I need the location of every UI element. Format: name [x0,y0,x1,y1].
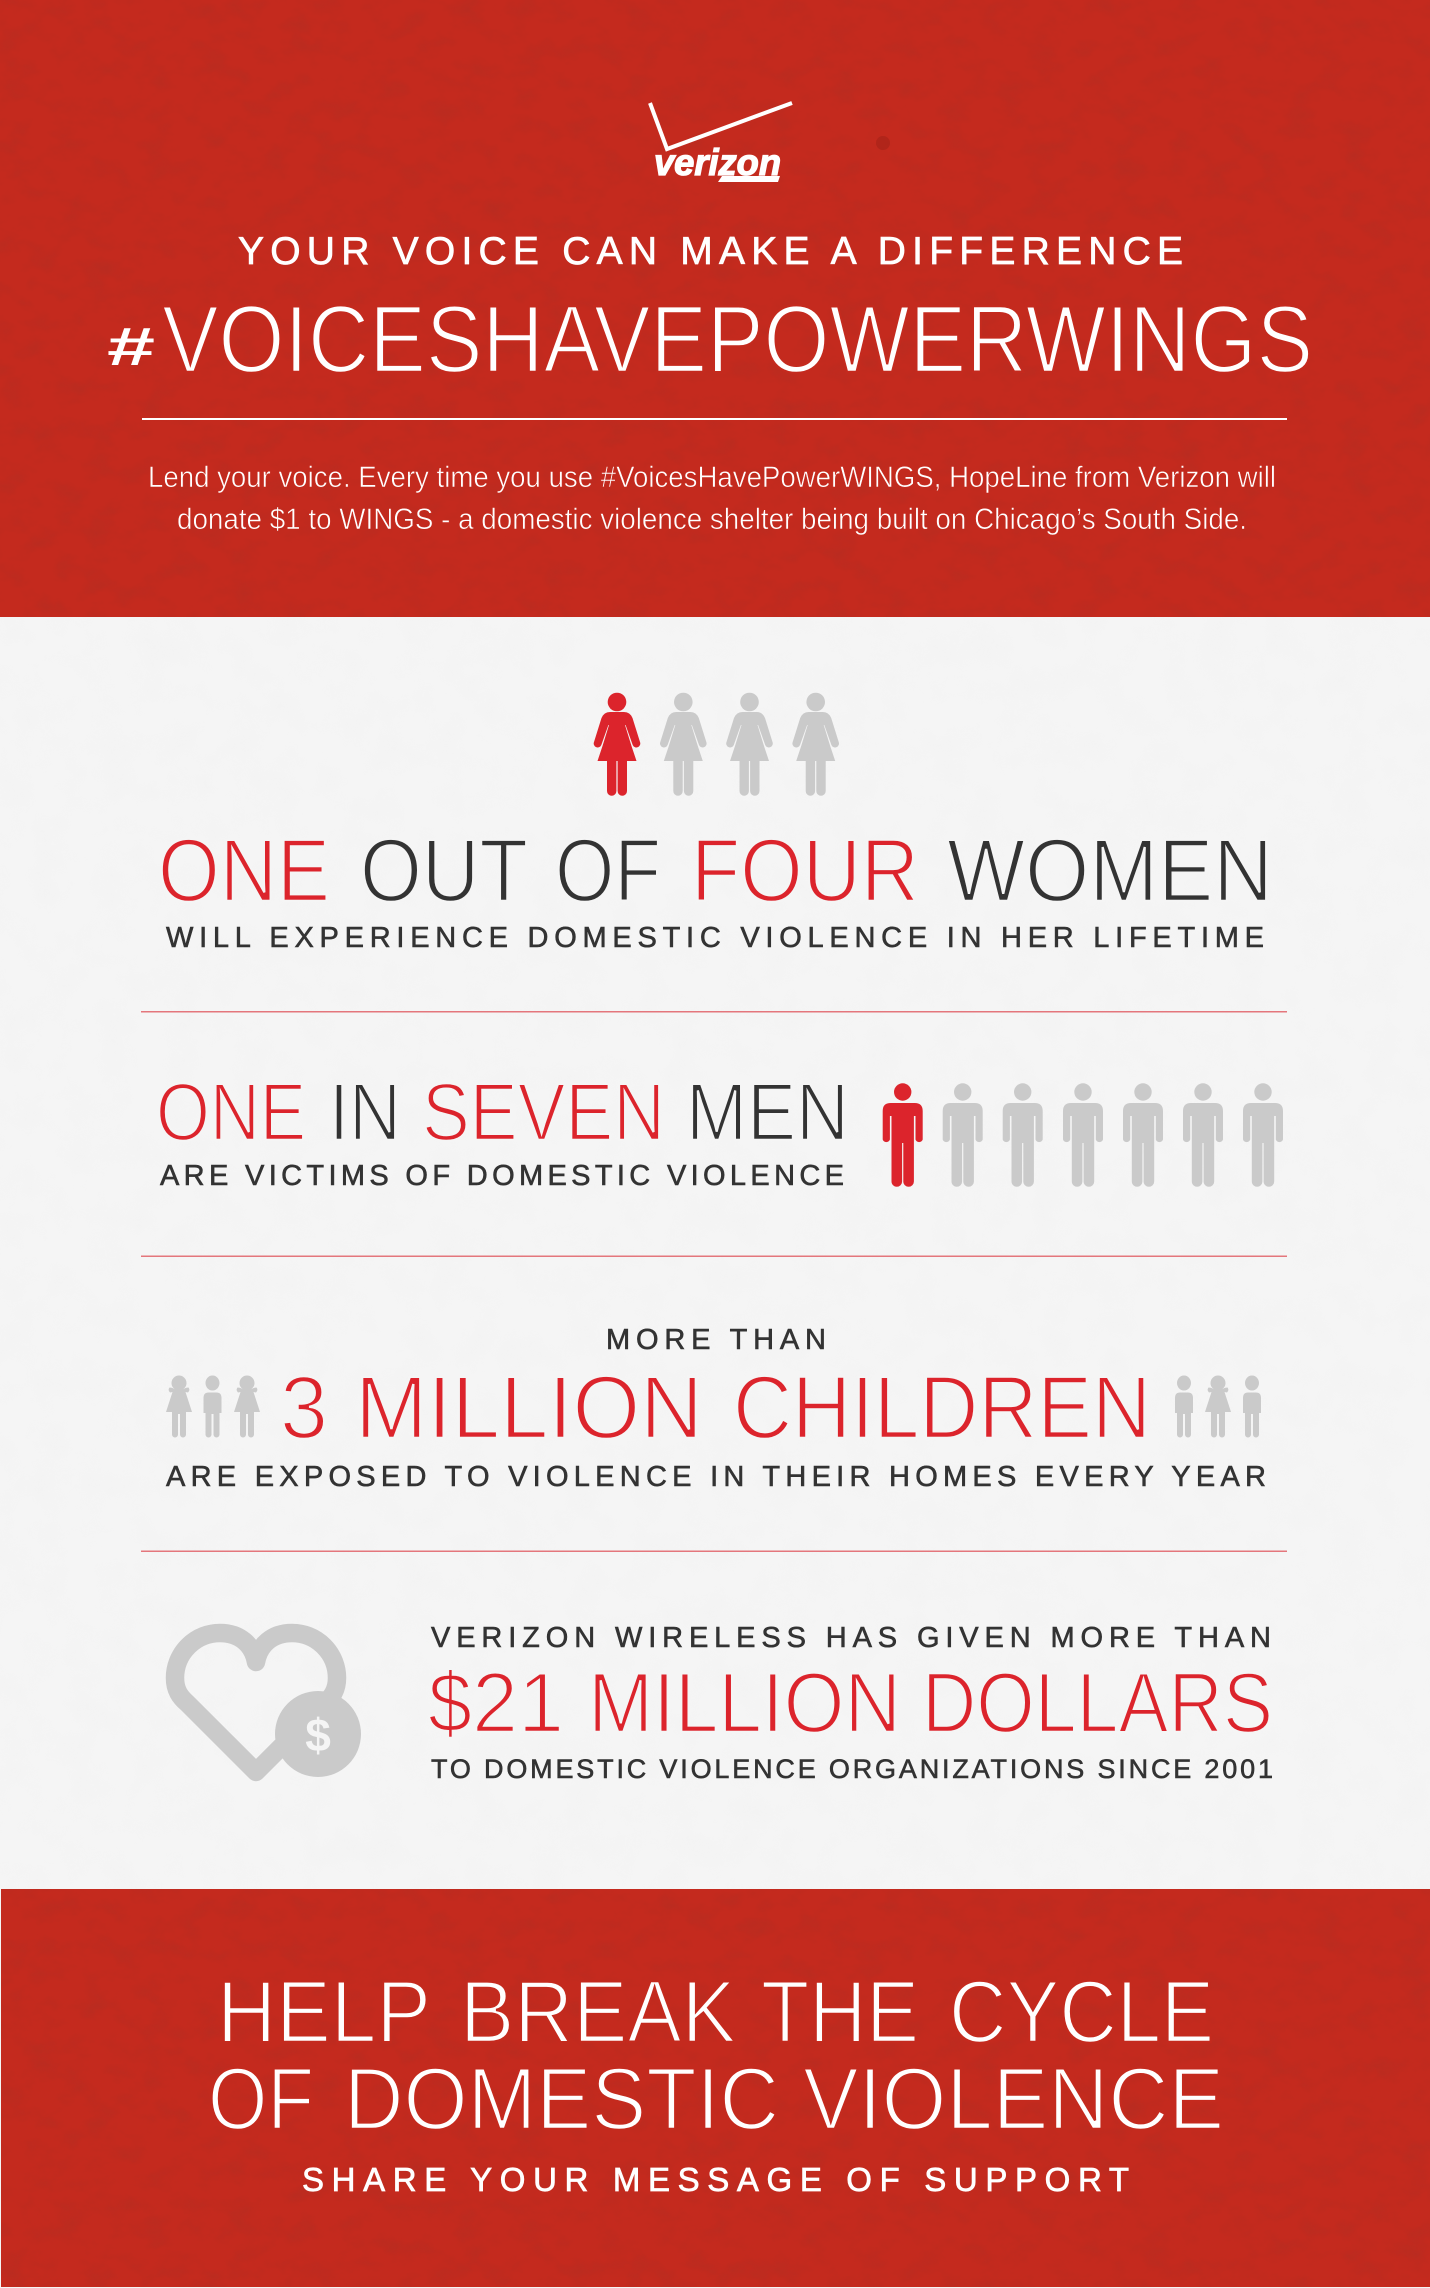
icon: seven men [883,1083,1283,1187]
heading: one in seven men: SEVEN [422,1067,665,1158]
icon: children left [166,1376,260,1438]
panel: women statistic [158,693,1273,954]
text block: intro [148,461,1276,536]
text: more than: MORE THAN [606,1324,826,1356]
text: donation lines: VERIZON WIRELESS HAS GIVEN MORE THAN [431,1622,1271,1654]
heading: one out of four women: FOUR [691,820,919,920]
panel: children statistic [166,1324,1266,1493]
logo: verizon: verizon [654,142,781,183]
heading: help break the cycle: DOMESTIC [344,2049,779,2148]
heading: one out of four women: OF [555,820,661,920]
text: donation lines: TO DOMESTIC VIOLENCE ORGANIZATIONS SINCE 2001 [431,1754,1273,1784]
panel: footer call to action [1,1889,1430,2287]
panel: men statistic [156,1067,1283,1192]
heading: 3 million children: MILLION [355,1357,703,1457]
heading: 3 million children [280,1357,1151,1457]
text: donation lines: 21 [472,1656,564,1751]
text: donation lines: MILLION [588,1656,901,1751]
heading: help break the cycle: OF [208,2049,314,2148]
text: donation lines: $ [428,1656,472,1751]
heading: help break the cycle: BREAK [460,1962,736,2061]
heading: 3 million children: CHILDREN [733,1357,1151,1457]
text: women subline: WILL EXPERIENCE DOMESTIC VIOLENCE IN HER LIFETIME [166,922,1264,954]
icon: children right [1175,1376,1261,1438]
text block: intro: donate $1 to WINGS - a domestic violence shelter being built on Chicago’s South Side. [177,503,1247,536]
subheading: your voice: YOUR VOICE CAN MAKE A DIFFERENCE [238,230,1183,273]
text block: intro: Lend your voice. Every time you use #VoicesHavePowerWINGS, HopeLine from Verizon will [148,461,1276,494]
title: hashtag: # [107,317,155,377]
panel: header [0,0,1430,617]
icon: heart with dollar coin [175,1633,361,1777]
text: donation lines: DOLLARS [922,1656,1273,1751]
heading: help break the cycle: CYCLE [949,1962,1214,2061]
heading: one out of four women [158,820,1273,920]
title: hashtag: VOICESHAVEPOWERWINGS [162,286,1313,393]
heading: 3 million children: 3 [280,1357,328,1457]
icon: heart with dollar coin: $ [305,1709,331,1761]
heading: help break the cycle: THE [761,1962,919,2061]
heading: one out of four women: WOMEN [947,820,1273,920]
heading: one in seven men [156,1067,849,1158]
text: share your message: SHARE YOUR MESSAGE OF SUPPORT [302,2161,1129,2198]
heading: one in seven men: ONE [156,1067,306,1158]
heading: one in seven men: MEN [686,1067,849,1158]
logo: verizon [650,103,792,183]
heading: help break the cycle [208,1962,1224,2148]
text: children subline: ARE EXPOSED TO VIOLENCE IN THEIR HOMES EVERY YEAR [166,1461,1266,1493]
heading: one out of four women: OUT [360,820,528,920]
panel: donation statistic [175,1622,1273,1784]
heading: help break the cycle: VIOLENCE [803,2049,1224,2148]
text: men subline: ARE VICTIMS OF DOMESTIC VIOLENCE [160,1160,844,1192]
icon: four women [594,693,839,796]
text: donation lines [428,1622,1273,1784]
heading: one out of four women: ONE [158,820,330,920]
heading: one in seven men: IN [329,1067,401,1158]
heading: help break the cycle: HELP [217,1962,431,2061]
